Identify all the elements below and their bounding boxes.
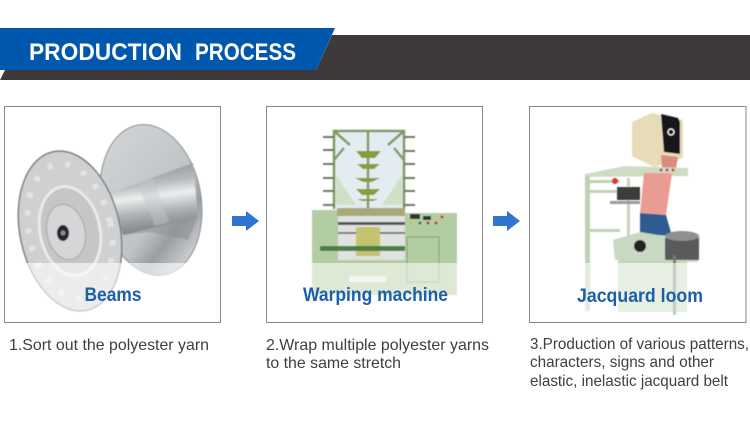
- title: PROCESS: [195, 39, 296, 66]
- text: step 3: [530, 336, 749, 390]
- label: Jacquard loom: Jacquard loom: [577, 286, 703, 307]
- text: step 2: 2.Wrap multiple polyester yarns: [266, 337, 489, 354]
- title: PRODUCTION: [29, 39, 182, 66]
- caption overlay: [530, 263, 745, 322]
- arrow 2: [493, 211, 520, 231]
- panel: warping machine: [266, 106, 482, 322]
- title: [29, 39, 296, 66]
- label: Warping machine: Warping machine: [303, 285, 448, 306]
- caption overlay: [5, 263, 220, 322]
- text: step 2: [266, 337, 489, 372]
- panel: beams: [4, 106, 221, 322]
- icon: cable reel: [4, 116, 213, 321]
- icon: warping machine: [312, 131, 457, 295]
- panel: jacquard loom: [530, 106, 746, 322]
- icon: jacquard loom: [585, 113, 700, 315]
- caption overlay: [267, 263, 482, 322]
- text: step 1: 1.Sort out the polyester yarn: [9, 337, 209, 354]
- header band: [0, 28, 750, 80]
- text: step 3: elastic, inelastic jacquard belt: [530, 373, 729, 390]
- arrow 1: [232, 211, 259, 231]
- label: Beams: Beams: [84, 285, 142, 306]
- text: step 3: characters, signs and other: [530, 354, 715, 371]
- text: step 2: to the same stretch: [266, 355, 401, 372]
